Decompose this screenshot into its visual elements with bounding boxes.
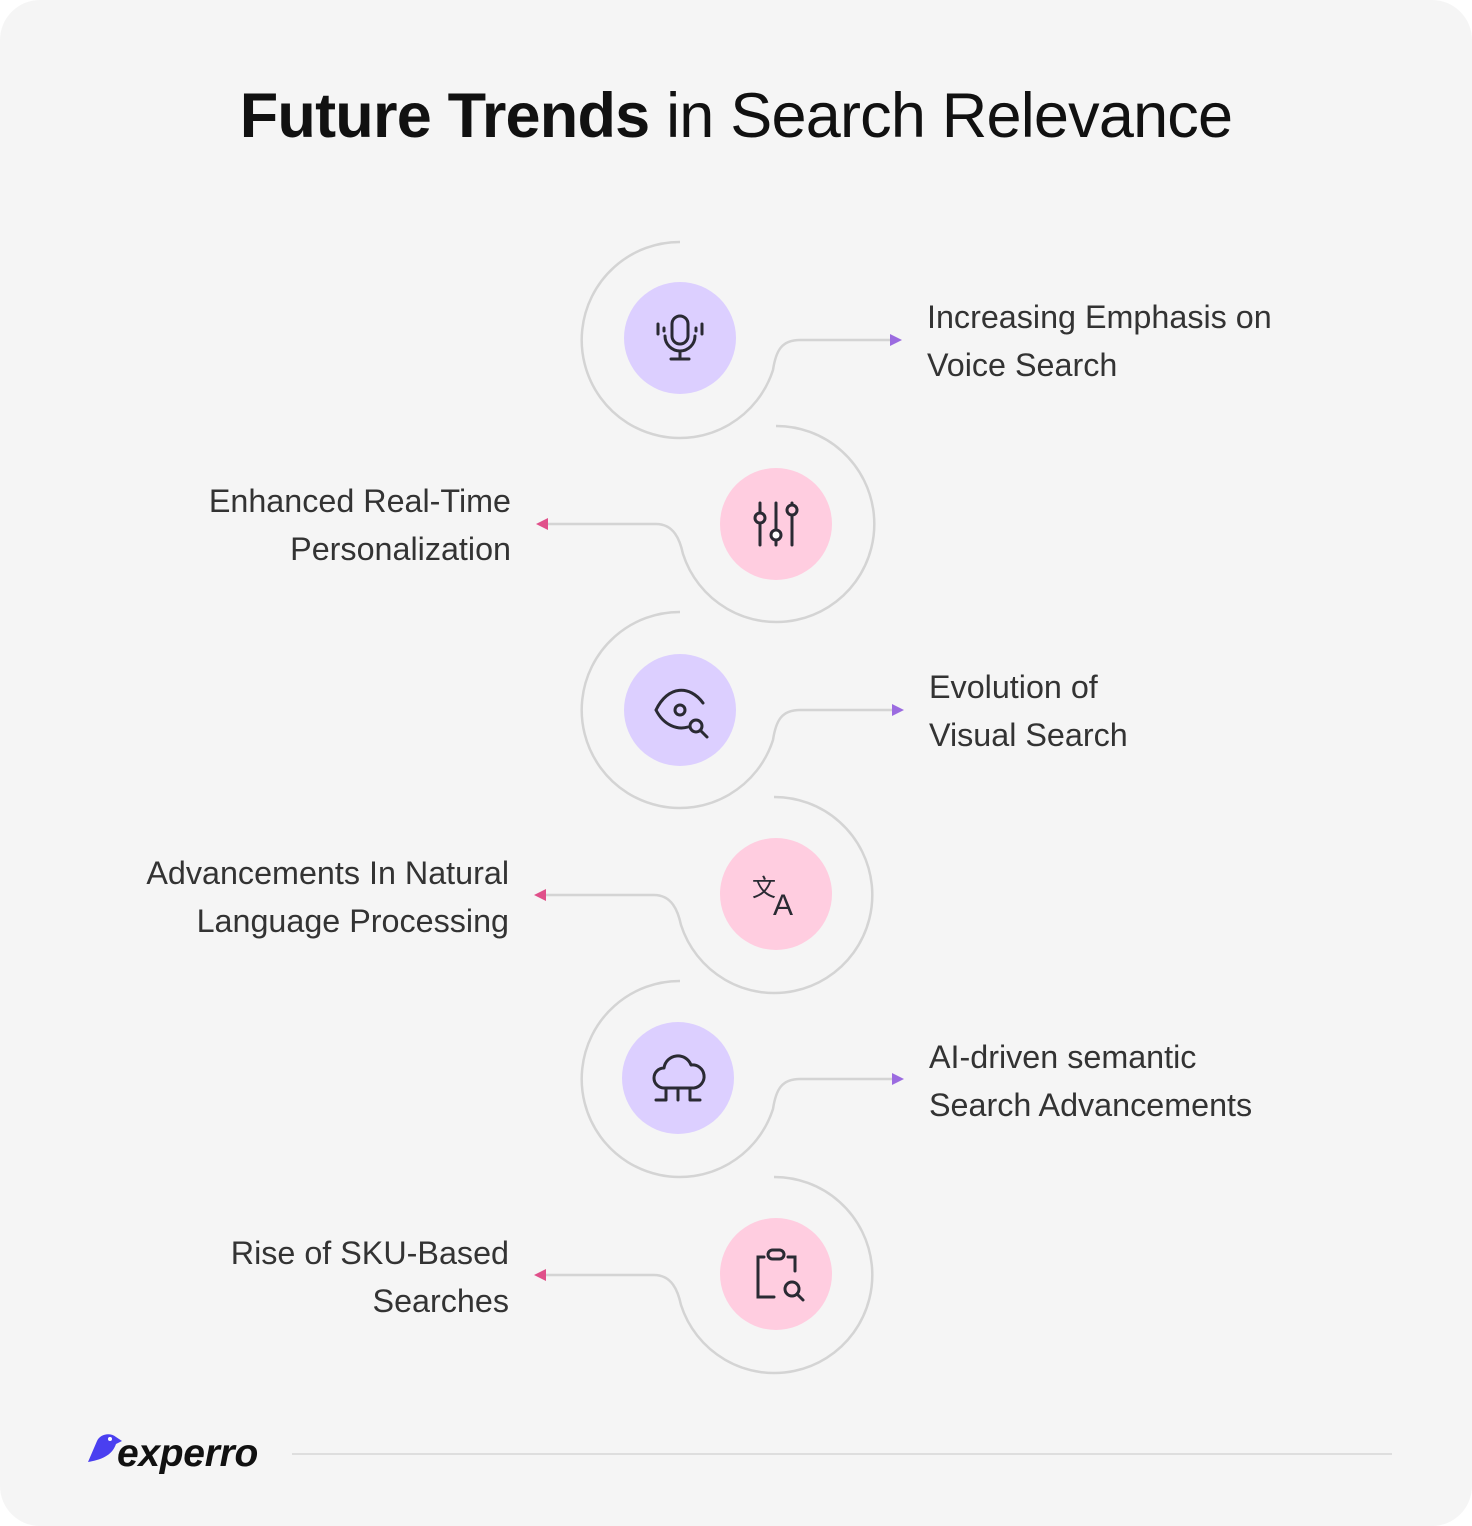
label 5	[929, 1039, 1252, 1123]
label 3: Evolution of	[929, 669, 1098, 705]
step 5 ring	[582, 981, 892, 1177]
label 4	[146, 855, 509, 939]
label 4: Advancements In Natural	[146, 855, 509, 891]
icon circle: eye search	[624, 654, 736, 766]
arrow 4	[534, 889, 546, 901]
step 6 ring	[546, 1177, 872, 1373]
icon circle: clipboard search	[720, 1218, 832, 1330]
step 1 ring and connector	[582, 242, 890, 438]
logo text: experro	[117, 1432, 258, 1475]
icon circle: translate	[720, 838, 832, 950]
arrow 1	[890, 334, 902, 346]
label 2: Enhanced Real-Time	[209, 483, 511, 519]
icon circle: microphone	[624, 282, 736, 394]
arrow 3	[892, 704, 904, 716]
arrow 5	[892, 1073, 904, 1085]
icon circle: sliders	[720, 468, 832, 580]
label 2: Personalization	[290, 531, 511, 567]
label 3	[929, 669, 1128, 753]
logo bird	[88, 1434, 122, 1462]
label 5: AI-driven semantic	[929, 1039, 1196, 1075]
label 3: Visual Search	[929, 717, 1128, 753]
label 2	[209, 483, 511, 567]
label 6	[231, 1235, 509, 1319]
step 3 ring	[582, 612, 892, 808]
icon circle: translate: A	[773, 889, 793, 922]
title: Future Trends in Search Relevance	[240, 81, 1232, 151]
label 1: Voice Search	[927, 347, 1117, 383]
step 4 ring	[546, 797, 872, 993]
arrow 2	[536, 518, 548, 530]
step 2 ring and connector	[548, 426, 874, 622]
label 6: Searches	[373, 1283, 509, 1319]
label 4: Language Processing	[197, 903, 509, 939]
arrow 6	[534, 1269, 546, 1281]
icon circle: translate: 文	[752, 868, 776, 903]
label 5: Search Advancements	[929, 1087, 1252, 1123]
label 1	[927, 299, 1272, 383]
label 1: Increasing Emphasis on	[927, 299, 1272, 335]
icon circle: cloud network	[622, 1022, 734, 1134]
footer divider	[292, 1453, 1392, 1455]
label 6: Rise of SKU-Based	[231, 1235, 509, 1271]
